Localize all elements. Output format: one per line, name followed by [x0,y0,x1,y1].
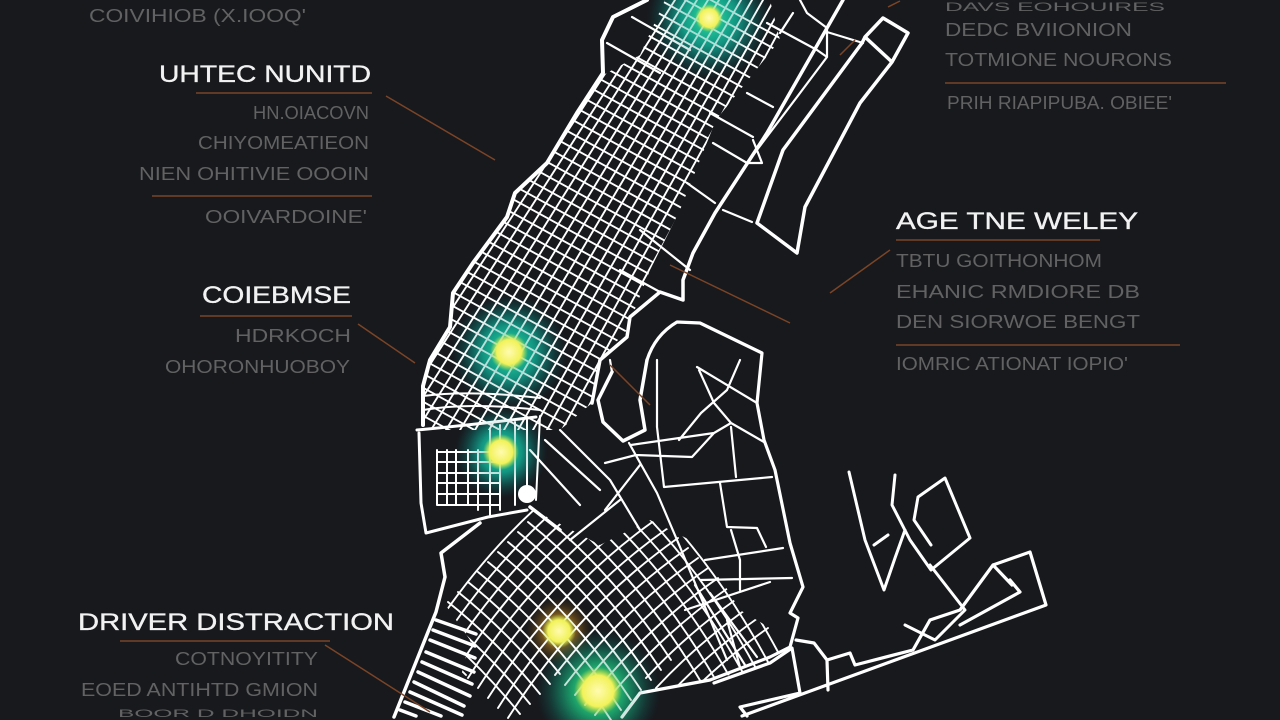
bay loop [598,360,647,441]
callout: COIEBMSE: OHORONHUOBOY [165,357,350,377]
callout: DRIVER DISTRACTION: DRIVER DISTRACTION [78,609,394,636]
glow tint over the streets [463,0,759,720]
upper island dense street grid [425,0,780,430]
long parallelogram park [757,18,908,253]
lower east shore [714,552,1046,716]
callout: top right [840,0,1226,113]
lower district left coastline [394,507,560,717]
callout: top right: DEDC BVIIONION [945,20,1132,40]
callout: UHTEC NUNITD: HN.OIACOVN [253,103,369,123]
callout: AGE TNE WELEY: EHANIC RMDIORE DB [896,282,1140,302]
glow: map hot spots [451,0,771,720]
upper east sparse streets [607,0,863,292]
callout: UHTEC NUNITD [139,61,495,227]
callout: top right: PRIH RIAPIPUBA. OBIEE' [947,93,1172,113]
eastern district coast [622,322,803,717]
callout: AGE TNE WELEY [610,208,1180,405]
map: street outline of the city [330,0,1046,720]
callout: AGE TNE WELEY: TBTU GOITHONHOM [896,251,1102,271]
white junction blob [518,485,536,503]
callout: UHTEC NUNITD: OOIVARDOINE' [205,207,367,227]
callout: AGE TNE WELEY: IOMRIC ATIONAT IOPIO' [896,354,1128,374]
callout: UHTEC NUNITD: UHTEC NUNITD [159,61,371,88]
callout: AGE TNE WELEY: DEN SIORWOE BENGT [896,312,1140,332]
upper island coastline [423,0,647,425]
callout: DRIVER DISTRACTION [78,609,430,720]
callout: COIEBMSE: COIEBMSE [202,282,351,309]
callout: DRIVER DISTRACTION: EOED ANTIHTD GMION [81,680,318,700]
small island shapes [849,472,970,640]
eastern district sparse streets [530,360,792,667]
callout: DRIVER DISTRACTION: BOOR D DHOIDN [118,708,318,720]
upper island east shore [592,0,843,403]
callout: top left: COIVIHIOB (X.IOOQ' [89,6,306,26]
callout: top right: TOTMIONE NOURONS [945,50,1172,70]
callout: UHTEC NUNITD: NIEN OHITIVIE OOOIN [139,164,369,184]
callout: COIEBMSE [165,282,415,377]
box district street grid [423,393,540,515]
map: hot spot cores [483,4,723,715]
callout: top right: DAVS EOHOUIRES [945,0,1165,14]
lower district dense street fan [447,510,778,720]
callout: AGE TNE WELEY: AGE TNE WELEY [896,208,1138,235]
callout: DRIVER DISTRACTION: COTNOYITITY [175,649,318,669]
lower left hatching [400,620,476,716]
middle box district [417,417,536,533]
callout: COIEBMSE: HDRKOCH [235,326,351,346]
callout: UHTEC NUNITD: CHIYOMEATIEON [198,133,369,153]
